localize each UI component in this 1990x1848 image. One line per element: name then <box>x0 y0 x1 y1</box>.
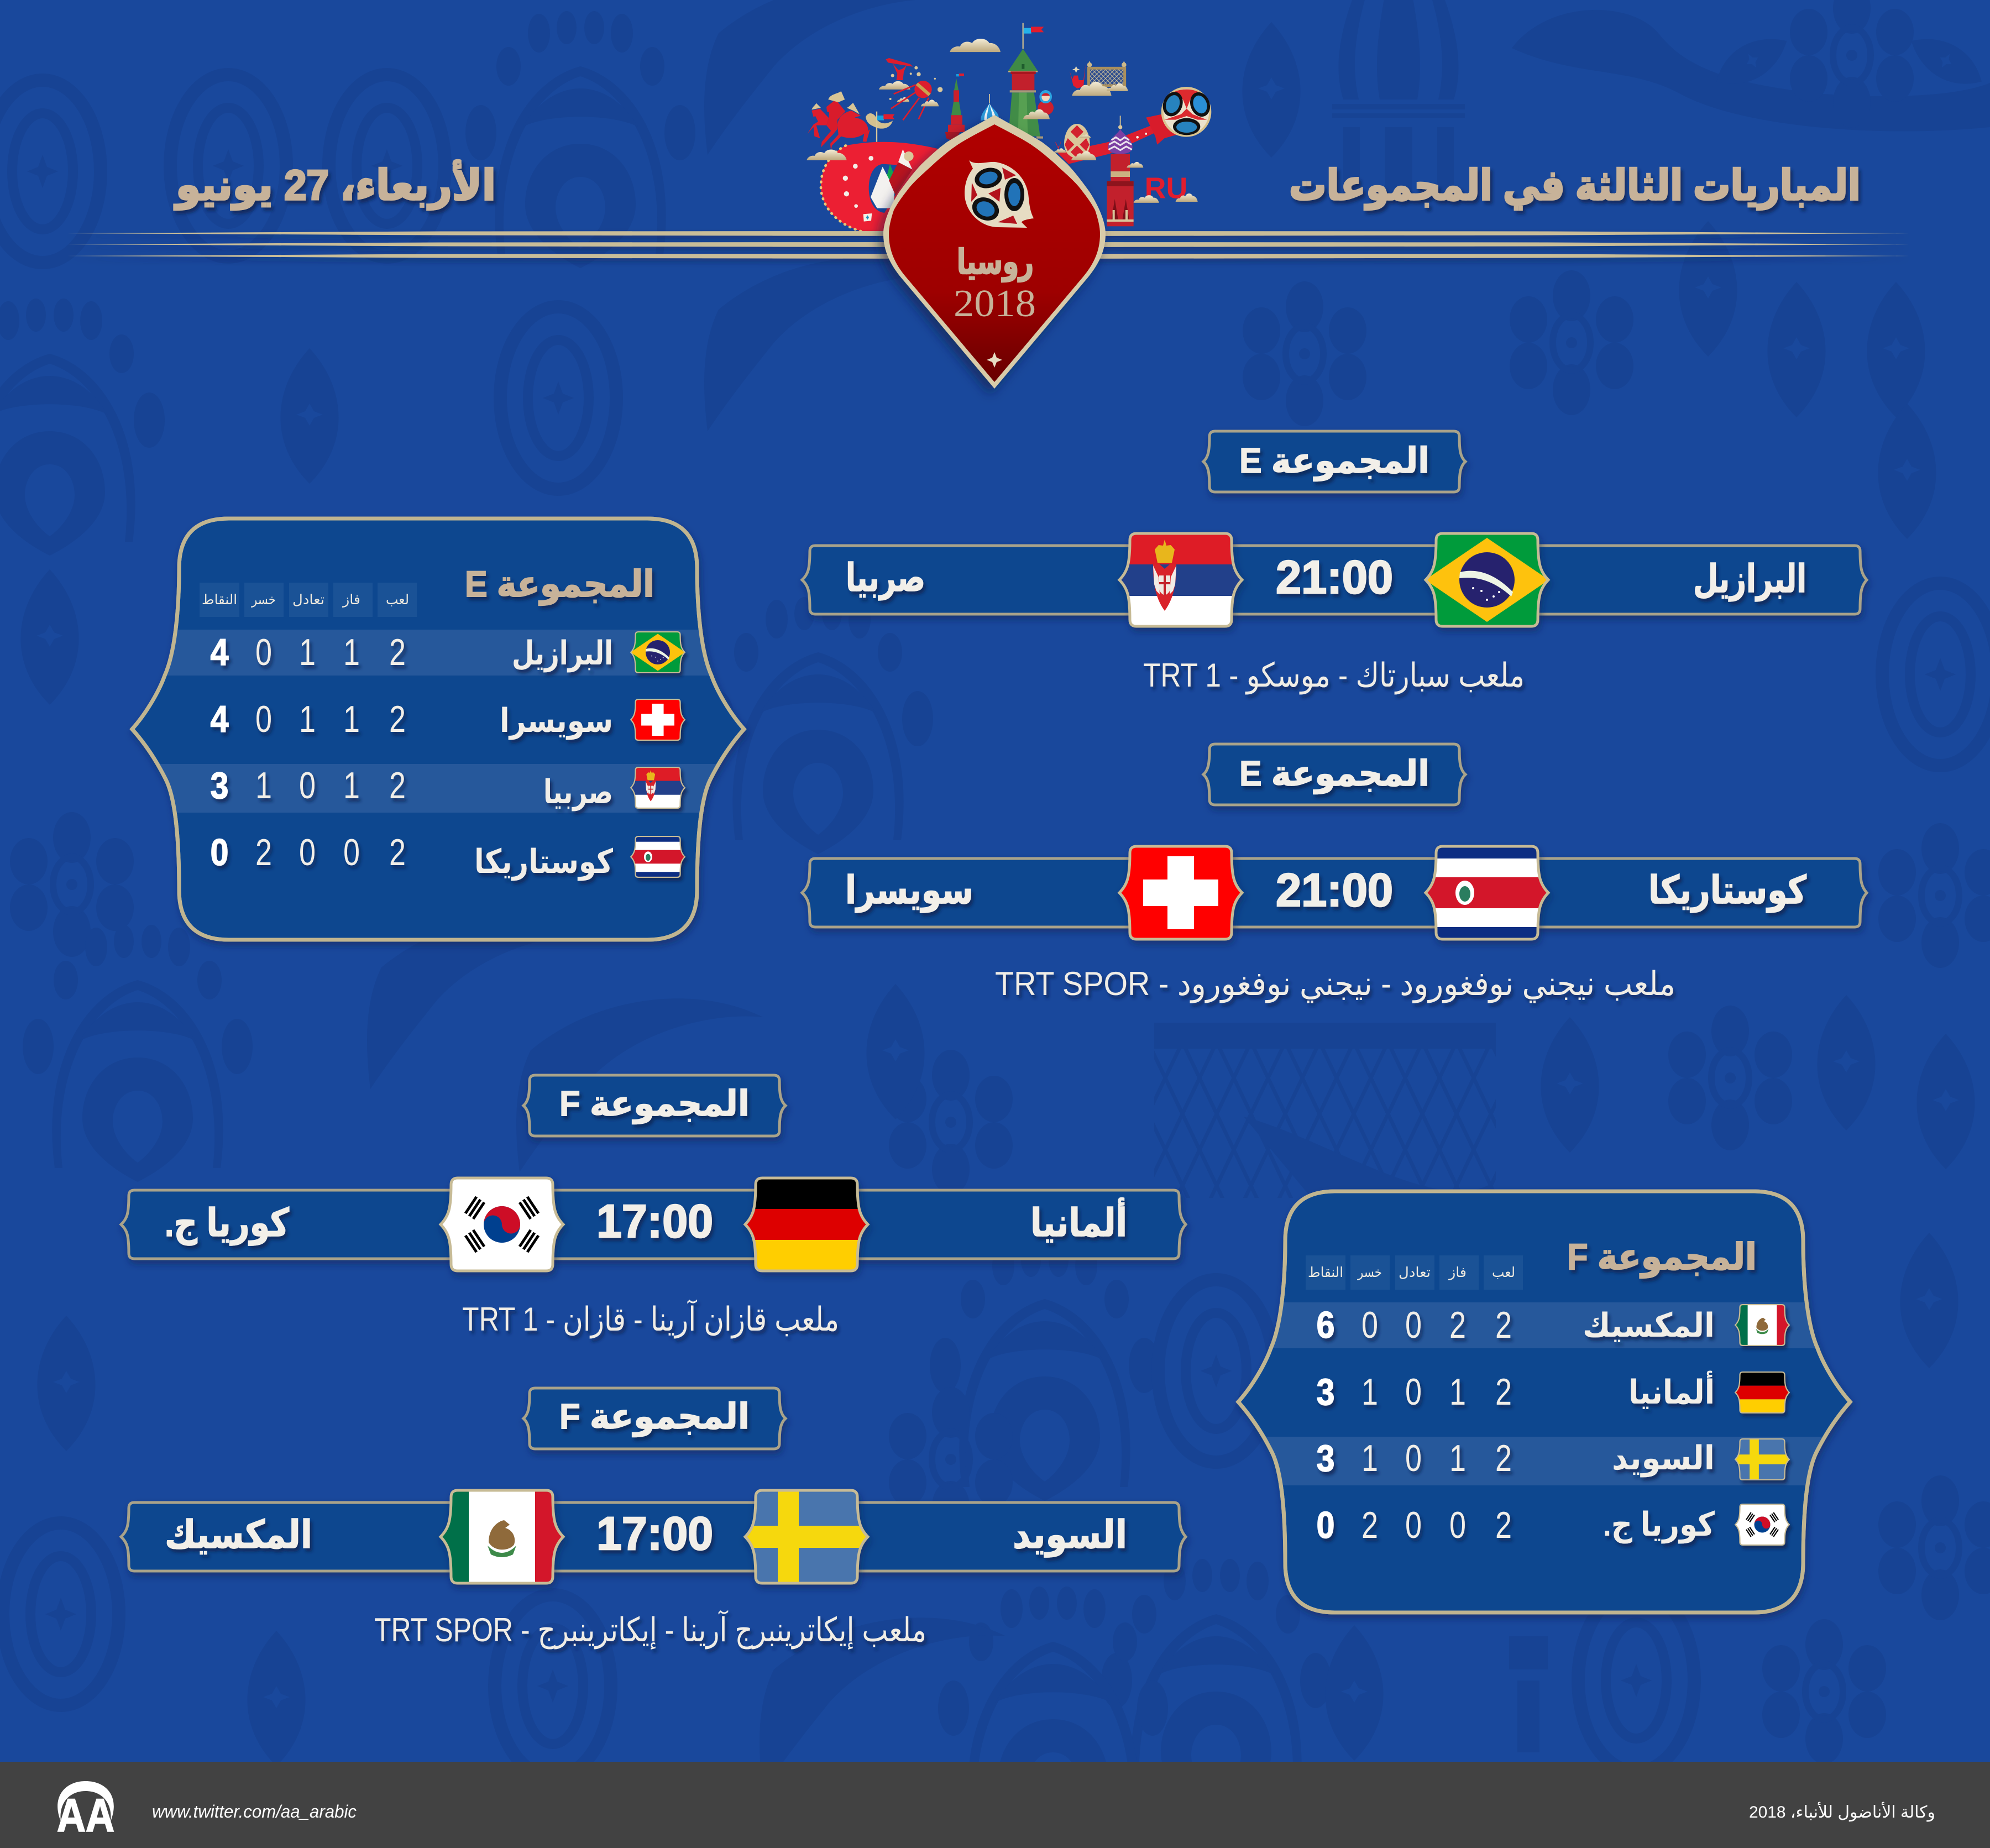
title: third round group matches: المباريات الثالثة في المجموعات <box>1289 162 1861 210</box>
flag: Switzerland <box>1117 843 1244 943</box>
match bar <box>121 1190 1186 1259</box>
red horses <box>808 91 870 151</box>
panel: group E standings <box>127 519 752 940</box>
group label <box>1203 431 1465 492</box>
row: Switzerland: 2 <box>389 698 406 740</box>
kickoff time: 21:00 <box>1276 551 1393 603</box>
row: Switzerland: 0 <box>255 698 272 740</box>
satellite <box>891 81 939 120</box>
flag: Germany <box>743 1175 870 1274</box>
small cloud <box>1127 162 1143 167</box>
row: Germany: 0 <box>1405 1371 1422 1413</box>
flag: Mexico <box>438 1487 565 1587</box>
football <box>1160 87 1213 137</box>
group label <box>1203 744 1465 805</box>
row: Sweden <box>1317 1437 1790 1481</box>
decorated egg <box>1054 124 1096 160</box>
row: Costa Rica: كوستاريكا <box>474 843 613 881</box>
row: Germany: 1 <box>1449 1371 1466 1413</box>
kickoff time: 17:00 <box>596 1507 713 1559</box>
row: Serbia: 2 <box>389 765 406 807</box>
row: South Korea: 0 <box>1317 1504 1334 1546</box>
row: Brazil: 1 <box>343 631 360 673</box>
small tower <box>945 74 965 142</box>
match bar <box>121 1503 1186 1571</box>
matryoshka <box>1038 90 1054 115</box>
group label: المجموعة F <box>559 1083 750 1124</box>
row: Costa Rica: 0 <box>299 831 316 873</box>
table header cells: تعادل <box>292 592 324 608</box>
row: Mexico: 6 <box>1317 1304 1334 1346</box>
match bar <box>802 858 1867 927</box>
row: Sweden: 1 <box>1449 1437 1466 1479</box>
header decorative lines <box>67 231 1909 259</box>
group F match 2 <box>121 1388 1186 1650</box>
AA logo: AA <box>57 1789 114 1841</box>
team: Costa Rica: كوستاريكا <box>1648 868 1806 913</box>
row: Germany: 3 <box>1317 1371 1334 1413</box>
row: Mexico: 0 <box>1405 1304 1422 1346</box>
row: Switzerland: 1 <box>299 698 316 740</box>
row: Serbia: صربيا <box>543 773 613 812</box>
table header cells: خسر <box>250 592 276 608</box>
red ring with mountains <box>821 142 940 233</box>
flag: Serbia <box>1117 530 1244 629</box>
header illustrations: Russian landmarks <box>807 23 1213 233</box>
flag with cream tail <box>866 112 894 142</box>
group label: المجموعة F <box>559 1396 750 1437</box>
team: Germany: ألمانيا <box>1030 1197 1127 1244</box>
RU text: RU <box>1145 172 1187 205</box>
row: Brazil: 4 <box>210 631 229 673</box>
tower cloud <box>1023 109 1050 119</box>
emblem star <box>987 352 1002 368</box>
venue: ملعب إيكاترينبرج آرينا - إيكاترينبرج - TRT SPOR <box>374 1610 926 1650</box>
row: Costa Rica: 0 <box>343 831 360 873</box>
panel heading: المجموعة E <box>465 563 654 606</box>
group label: المجموعة E <box>1239 753 1429 794</box>
row: Switzerland: سويسرا <box>500 702 613 740</box>
venue: ملعب نيجني نوفغورود - نيجني نوفغورود - TRT SPOR <box>995 965 1675 1003</box>
table header cells: النقاط <box>1308 1265 1343 1280</box>
table header cells: تعادل <box>1399 1265 1431 1280</box>
row: Germany: 1 <box>1361 1371 1378 1413</box>
main Kremlin tower <box>1008 23 1044 139</box>
row: Brazil: 0 <box>255 631 272 673</box>
emblem text: Russia: روسيا <box>957 243 1034 282</box>
row: Costa Rica <box>210 831 686 881</box>
emblem: Russia 2018 badge <box>883 115 1106 389</box>
table header cells: لعب <box>1492 1265 1515 1280</box>
table header cells <box>200 583 417 617</box>
row: Serbia: 0 <box>299 765 316 807</box>
row: South Korea: 0 <box>1449 1504 1466 1546</box>
twitter url: www.twitter.com/aa_arabic <box>152 1802 357 1821</box>
row: Sweden: 0 <box>1405 1437 1422 1479</box>
row: Brazil: 2 <box>389 631 406 673</box>
table header cells: خسر <box>1357 1265 1382 1280</box>
plane figure <box>879 58 942 100</box>
flag: Costa Rica <box>1423 843 1551 943</box>
group E match 2 <box>802 744 1867 1003</box>
blue dome <box>981 94 999 121</box>
row: Mexico: 0 <box>1361 1304 1378 1346</box>
row: South Korea: كوريا ج. <box>1603 1506 1715 1544</box>
emblem logo <box>965 160 1034 228</box>
flag: Brazil <box>1423 530 1551 630</box>
row: Costa Rica: 0 <box>210 831 229 873</box>
row: Serbia: 1 <box>255 765 272 807</box>
team: Mexico: المكسيك <box>165 1513 312 1556</box>
date: الأربعاء، 27 يونيو <box>174 160 496 210</box>
group label: المجموعة E <box>1239 441 1429 481</box>
flag: South Korea <box>438 1175 565 1274</box>
RU text <box>1134 172 1198 205</box>
row: Serbia: 3 <box>210 765 229 807</box>
row: Sweden: 1 <box>1361 1437 1378 1479</box>
row: Sweden: 3 <box>1317 1437 1334 1479</box>
row: Germany <box>1317 1370 1790 1415</box>
venue: ملعب سبارتاك - موسكو - TRT 1 <box>1143 657 1525 695</box>
row: Sweden: 2 <box>1495 1437 1512 1479</box>
emblem year: 2018 <box>954 282 1036 325</box>
row: Brazil: البرازيل <box>512 635 613 673</box>
row: Mexico: 2 <box>1495 1304 1512 1346</box>
team: Switzerland: سويسرا <box>845 868 973 913</box>
table header cells: فاز <box>342 592 360 608</box>
flag: Sweden <box>743 1487 870 1587</box>
team: Brazil: البرازيل <box>1693 557 1806 601</box>
row: Costa Rica: 2 <box>389 831 406 873</box>
venue: ملعب قازان آرينا - قازان - TRT 1 <box>462 1299 839 1339</box>
table header cells <box>1306 1255 1523 1290</box>
panel: group F standings <box>1233 1191 1858 1613</box>
row: Switzerland: 1 <box>343 698 360 740</box>
row: Mexico: 2 <box>1449 1304 1466 1346</box>
row: Germany: ألمانيا <box>1628 1370 1715 1411</box>
team: South Korea: كوريا ج. <box>165 1201 289 1245</box>
footer bar <box>0 1762 1990 1848</box>
team: Sweden: السويد <box>1013 1513 1127 1557</box>
cloud under horses <box>807 149 847 160</box>
table header cells: فاز <box>1448 1265 1467 1280</box>
ball ribbon and flames <box>1057 114 1177 164</box>
group E match 1 <box>802 431 1867 695</box>
goal and player <box>1070 61 1128 96</box>
row: Sweden: السويد <box>1612 1439 1715 1478</box>
table header cells: النقاط <box>202 592 237 608</box>
right tower <box>1107 116 1134 226</box>
row: Serbia: 1 <box>343 765 360 807</box>
row: Germany: 2 <box>1495 1371 1512 1413</box>
kickoff time: 21:00 <box>1276 864 1393 916</box>
row: Brazil: 1 <box>299 631 316 673</box>
agency credit: وكالة الأناضول للأنباء، 2018 <box>1749 1801 1935 1822</box>
kickoff time: 17:00 <box>596 1195 713 1247</box>
row: Costa Rica: 2 <box>255 831 272 873</box>
row: South Korea: 0 <box>1405 1504 1422 1546</box>
team: Serbia: صربيا <box>846 556 925 600</box>
row: Switzerland: 4 <box>210 698 229 740</box>
row: Switzerland <box>210 698 686 742</box>
row: South Korea: 2 <box>1361 1504 1378 1546</box>
cloud top <box>950 39 1001 52</box>
row: Serbia <box>210 765 686 812</box>
match bar <box>802 546 1867 614</box>
group label <box>523 1388 785 1449</box>
group F match 1 <box>121 1075 1186 1339</box>
row: Mexico <box>1317 1303 1790 1347</box>
group label <box>523 1075 785 1136</box>
row: Brazil <box>210 630 686 674</box>
panel heading: المجموعة F <box>1567 1236 1757 1279</box>
row: South Korea <box>1317 1503 1790 1547</box>
row: Mexico: المكسيك <box>1583 1307 1715 1344</box>
row: South Korea: 2 <box>1495 1504 1512 1546</box>
table header cells: لعب <box>386 592 409 608</box>
